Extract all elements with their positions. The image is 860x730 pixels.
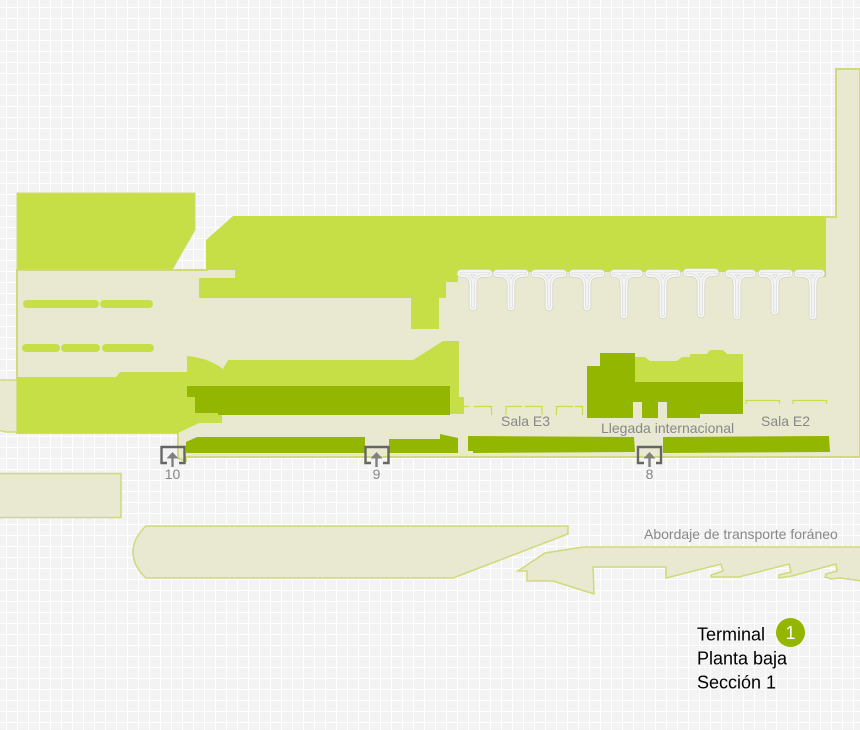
main terminal building	[17, 69, 860, 461]
zone: west pills	[22, 300, 154, 352]
bus platform right	[518, 547, 860, 594]
gate 10: 10	[165, 466, 180, 482]
west lot	[0, 474, 121, 518]
badge: terminal number: 1	[785, 623, 796, 643]
location caption	[697, 618, 805, 692]
bus platform left	[133, 526, 568, 578]
zone: southwest hall	[17, 341, 464, 433]
zone: north concourse	[199, 216, 826, 329]
gate 9	[366, 447, 388, 482]
zone: northwest block	[17, 193, 195, 270]
zone: dark strip gates 10 to 9	[186, 437, 365, 453]
caption: Terminal: Terminal	[697, 624, 765, 644]
caption: Sección 1: Sección 1	[697, 672, 776, 692]
gate 9: 9	[373, 466, 381, 482]
gate 8: 8	[646, 466, 654, 482]
zone: dark hall west	[187, 386, 450, 415]
west annex	[0, 380, 17, 432]
label: Abordaje de transporte foráneo: Abordaje de transporte foráneo	[644, 526, 838, 542]
gate 10	[162, 447, 184, 482]
zone: central dark block	[587, 353, 743, 418]
zone: dark strip Sala E2	[663, 436, 830, 453]
zone: central light block	[634, 350, 743, 384]
caption: Planta baja: Planta baja	[697, 648, 788, 668]
gate 8	[638, 447, 661, 482]
zone: dark strip gate 9 east	[389, 434, 458, 453]
label: Llegada internacional: Llegada internacional	[601, 420, 734, 436]
boarding piers	[461, 272, 821, 316]
label: Sala E2: Sala E2	[761, 413, 810, 429]
label: Sala E3: Sala E3	[501, 413, 550, 429]
terminal floor plan	[0, 69, 860, 594]
waiting room outlines	[464, 400, 826, 415]
zone: dark strip Sala E3	[468, 436, 635, 453]
